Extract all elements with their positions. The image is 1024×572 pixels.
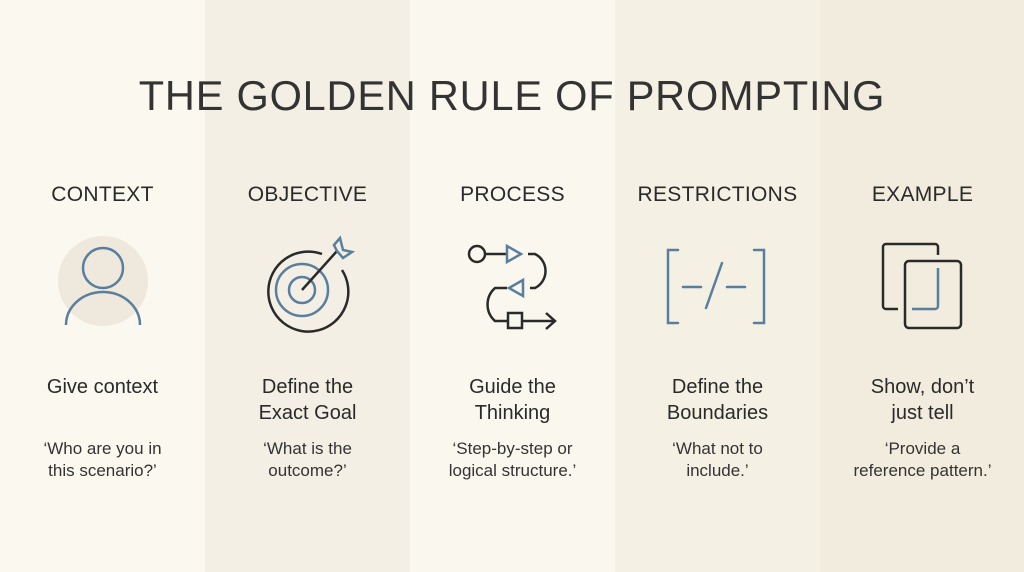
quote: example: ‘Provide a [885, 439, 960, 458]
panel: objective [248, 183, 367, 480]
quote: restrictions: ‘What not to [672, 439, 763, 458]
text: define exact goal [259, 376, 356, 424]
quote: restrictions: include.’ [686, 461, 749, 480]
quote: objective [263, 439, 352, 480]
text: guide thinking: Guide the [469, 376, 556, 398]
text: define exact goal: Exact Goal [259, 402, 356, 424]
panel: context [43, 183, 162, 480]
quote: example [854, 439, 991, 480]
quote: objective: outcome?’ [268, 461, 347, 480]
icon: flow path [468, 244, 557, 330]
panel: process [449, 183, 576, 480]
text: define boundaries [667, 376, 768, 424]
text: define boundaries: Define the [672, 376, 763, 398]
text: give context: Give context [47, 376, 158, 398]
text: show dont tell [871, 376, 974, 424]
quote: objective: ‘What is the [263, 439, 352, 458]
quote: process [449, 439, 576, 480]
text: define boundaries: Boundaries [667, 402, 768, 424]
heading: context: CONTEXT [51, 183, 154, 206]
icon: brackets [666, 248, 766, 324]
text: guide thinking [469, 376, 556, 424]
quote: process: ‘Step-by-step or [452, 439, 572, 458]
quote: context: this scenario?’ [48, 461, 157, 480]
icon: copies [882, 242, 962, 330]
title: THE GOLDEN RULE OF PROMPTING [139, 72, 885, 119]
quote: context: ‘Who are you in [43, 439, 162, 458]
text: show dont tell: Show, don’t [871, 376, 974, 398]
heading: process: PROCESS [460, 183, 565, 206]
panel: example [854, 183, 991, 480]
heading: restrictions: RESTRICTIONS [638, 183, 797, 206]
quote: context [43, 439, 162, 480]
icon: target [267, 236, 355, 333]
icon: person [58, 236, 148, 326]
quote: process: logical structure.’ [449, 461, 576, 480]
quote: example: reference pattern.’ [854, 461, 991, 480]
quote: restrictions [672, 439, 763, 480]
text: show dont tell: just tell [891, 402, 954, 424]
text: define exact goal: Define the [262, 376, 353, 398]
heading: example: EXAMPLE [872, 183, 973, 206]
heading: objective: OBJECTIVE [248, 183, 367, 206]
panel: restrictions [638, 183, 797, 480]
text: guide thinking: Thinking [475, 402, 550, 424]
